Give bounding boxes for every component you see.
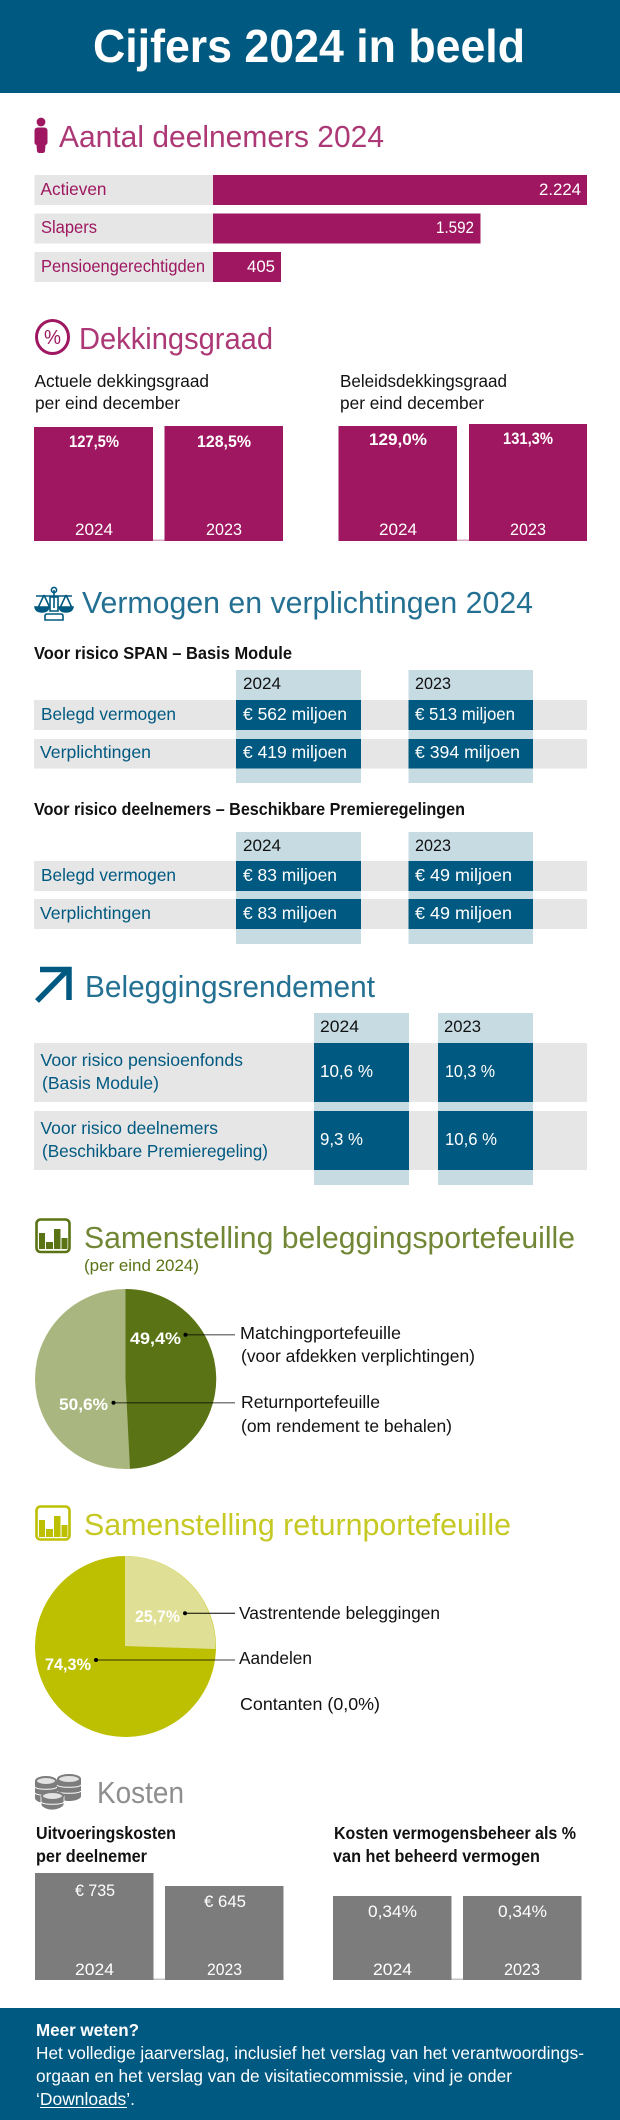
table: risico deelnemers: 2023 [415, 837, 451, 855]
table: rendement: 10,6 % [445, 1129, 497, 1149]
footer text: orgaan en het verslag van de visitatiecommissie, vind je onder [36, 2066, 512, 2086]
bar chart: beleidsdekkingsgraad: 2024 [379, 521, 417, 539]
bar chart: beleidsdekkingsgraad [338, 424, 587, 541]
table: risico SPAN: Verplichtingen [40, 742, 151, 762]
icon: arrow [37, 970, 69, 1001]
bar: actieven: 2.224 [539, 181, 581, 199]
icon: person [34, 118, 48, 153]
subheading: per eind 2024: (per eind 2024) [84, 1257, 199, 1275]
table: risico SPAN: € 513 miljoen [415, 704, 515, 724]
subheading: actuele dekkingsgraad [34, 371, 209, 413]
heading: aantal deelnemers: Aantal deelnemers 2024 [59, 119, 384, 154]
table: rendement: Voor risico deelnemers [40, 1118, 218, 1138]
title banner [0, 0, 620, 93]
callout: returnportefeuille: Returnportefeuille [241, 1392, 380, 1412]
bar chart: beleidsdekkingsgraad: 131,3% [503, 429, 553, 448]
icon: percent [36, 320, 68, 354]
subheading: risico deelnemers: Voor risico deelnemers – Beschikbare Premieregelingen [34, 799, 465, 819]
table: risico SPAN [34, 670, 587, 783]
table: rendement: 2024 [320, 1018, 359, 1036]
heading: dekkingsgraad: Dekkingsgraad [79, 321, 273, 356]
bar chart: uitvoeringskosten [35, 1873, 284, 1980]
pie chart: beleggingsportefeuille: 49,4% [130, 1329, 181, 1348]
table: rendement: Voor risico pensioenfonds [40, 1050, 243, 1070]
table: risico deelnemers: Verplichtingen [40, 903, 151, 923]
table: risico SPAN: € 394 miljoen [415, 742, 520, 762]
callout: matchingportefeuille: Matchingportefeuille [240, 1323, 401, 1343]
icon: bar chart [36, 1506, 70, 1540]
heading: beleggingsrendement: Beleggingsrendement [85, 969, 375, 1004]
bar chart: uitvoeringskosten: 2024 [75, 1961, 114, 1979]
heading: samenstelling returnportefeuille: Samenstelling returnportefeuille [84, 1507, 511, 1542]
footer text [36, 2043, 584, 2109]
bar: slapers [34, 214, 480, 244]
icon: bar chart [36, 1220, 70, 1252]
bar: actieven: Actieven [40, 179, 106, 199]
bar: pensioengerechtigden: Pensioengerechtigden [41, 256, 205, 276]
bar chart: beleidsdekkingsgraad: 129,0% [369, 430, 427, 449]
callout: returnportefeuille [112, 1392, 452, 1436]
pie chart: returnportefeuille: 25,7% [135, 1607, 180, 1626]
bar chart: kosten vermogensbeheer: 2024 [373, 1961, 412, 1979]
subheading: kosten vermogensbeheer: van het beheerd vermogen [333, 1846, 540, 1866]
callout: matchingportefeuille [184, 1323, 475, 1366]
subheading: kosten vermogensbeheer: Kosten vermogensbeheer als % [334, 1823, 576, 1843]
label: contanten: Contanten (0,0%) [240, 1694, 380, 1714]
bar chart: uitvoeringskosten: 2023 [207, 1961, 242, 1979]
callout: aandelen [94, 1648, 312, 1668]
footer text: ‘Downloads’. [36, 2089, 135, 2109]
bar: pensioengerechtigden: 405 [247, 258, 275, 276]
table: rendement [34, 1013, 587, 1185]
table: risico deelnemers: € 49 miljoen [415, 865, 512, 885]
panel: beleggingsrendement [34, 969, 587, 1185]
heading: samenstelling beleggingsportefeuille: Samenstelling beleggingsportefeuille [84, 1220, 575, 1255]
bar chart: actuele dekkingsgraad: 128,5% [197, 432, 251, 451]
bar chart: uitvoeringskosten: € 735 [75, 1882, 115, 1900]
subheading: actuele dekkingsgraad: per eind december [35, 393, 180, 413]
callout: aandelen: Aandelen [239, 1648, 312, 1668]
subheading: beleidsdekkingsgraad: per eind december [340, 393, 484, 413]
pie chart: returnportefeuille [35, 1556, 216, 1737]
table: rendement: 10,6 % [320, 1061, 373, 1081]
table: rendement: 9,3 % [320, 1129, 363, 1149]
table: rendement: (Beschikbare Premieregeling) [42, 1141, 268, 1161]
bar: actieven [34, 175, 587, 205]
table: risico deelnemers [34, 832, 587, 944]
table: rendement: (Basis Module) [42, 1073, 159, 1093]
bar: slapers: Slapers [41, 217, 97, 237]
panel: vermogen en verplichtingen [34, 585, 587, 944]
panel: meer weten [0, 2008, 620, 2120]
callout: matchingportefeuille: (voor afdekken verplichtingen) [241, 1346, 475, 1366]
bar chart: kosten vermogensbeheer: 2023 [504, 1961, 540, 1979]
panel: kosten [35, 1775, 582, 1980]
pie chart: beleggingsportefeuille [35, 1289, 216, 1469]
table: risico deelnemers: Belegd vermogen [41, 865, 176, 885]
bar chart: kosten vermogensbeheer [333, 1896, 582, 1980]
bar: slapers: 1.592 [436, 219, 474, 237]
panel: samenstelling returnportefeuille [35, 1506, 511, 1737]
subheading: risico SPAN: Voor risico SPAN – Basis Module [34, 643, 292, 663]
subheading: uitvoeringskosten: Uitvoeringskosten [36, 1823, 176, 1843]
table: risico deelnemers: 2024 [243, 837, 281, 855]
subheading: beleidsdekkingsgraad [340, 371, 507, 413]
table: risico SPAN: 2024 [243, 675, 281, 693]
subheading: actuele dekkingsgraad: Actuele dekkingsgraad [34, 371, 209, 391]
subheading: beleidsdekkingsgraad: Beleidsdekkingsgraad [340, 371, 507, 391]
heading: vermogen en verplichtingen: Vermogen en verplichtingen 2024 [82, 585, 533, 620]
callout: returnportefeuille: (om rendement te behalen) [241, 1416, 452, 1436]
pie chart: beleggingsportefeuille: 50,6% [59, 1395, 108, 1414]
footer text: Het volledige jaarverslag, inclusief het verslag van het verantwoordings- [36, 2043, 584, 2063]
table: risico deelnemers: € 83 miljoen [243, 865, 337, 885]
bar chart: kosten vermogensbeheer: 0,34% [368, 1903, 417, 1921]
table: risico deelnemers: € 49 miljoen [415, 903, 512, 923]
panel: samenstelling beleggingsportefeuille [35, 1220, 575, 1469]
pie chart: returnportefeuille: 74,3% [45, 1655, 91, 1674]
panel: aantal deelnemers [34, 118, 587, 282]
callout: vastrentende beleggingen: Vastrentende beleggingen [239, 1603, 440, 1623]
table: risico SPAN: € 419 miljoen [243, 742, 347, 762]
bar chart: actuele dekkingsgraad: 2024 [75, 521, 113, 539]
panel: dekkingsgraad [34, 320, 587, 541]
table: risico SPAN: Belegd vermogen [41, 704, 176, 724]
table: risico SPAN: € 562 miljoen [243, 704, 347, 724]
table: rendement: 10,3 % [445, 1061, 495, 1081]
heading: kosten: Kosten [97, 1775, 184, 1810]
subheading: uitvoeringskosten [36, 1823, 176, 1866]
bar chart: kosten vermogensbeheer: 0,34% [498, 1903, 547, 1921]
table: risico SPAN: 2023 [415, 675, 451, 693]
subheading: kosten vermogensbeheer [333, 1823, 576, 1866]
table: risico deelnemers: € 83 miljoen [243, 903, 337, 923]
icon: coins [35, 1775, 81, 1810]
bar: pensioengerechtigden [34, 252, 281, 282]
title: Cijfers 2024 in beeld [93, 20, 525, 72]
bar chart: actuele dekkingsgraad: 127,5% [69, 432, 119, 451]
footer heading: Meer weten? [36, 2020, 139, 2040]
icon: scales [35, 587, 73, 620]
subheading: uitvoeringskosten: per deelnemer [36, 1846, 147, 1866]
table: rendement: 2023 [444, 1018, 481, 1036]
bar chart: actuele dekkingsgraad: 2023 [206, 521, 242, 539]
icon: percent: % [44, 327, 61, 349]
bar chart: beleidsdekkingsgraad: 2023 [510, 521, 546, 539]
bar chart: actuele dekkingsgraad [34, 426, 283, 541]
bar chart: uitvoeringskosten: € 645 [204, 1893, 246, 1911]
